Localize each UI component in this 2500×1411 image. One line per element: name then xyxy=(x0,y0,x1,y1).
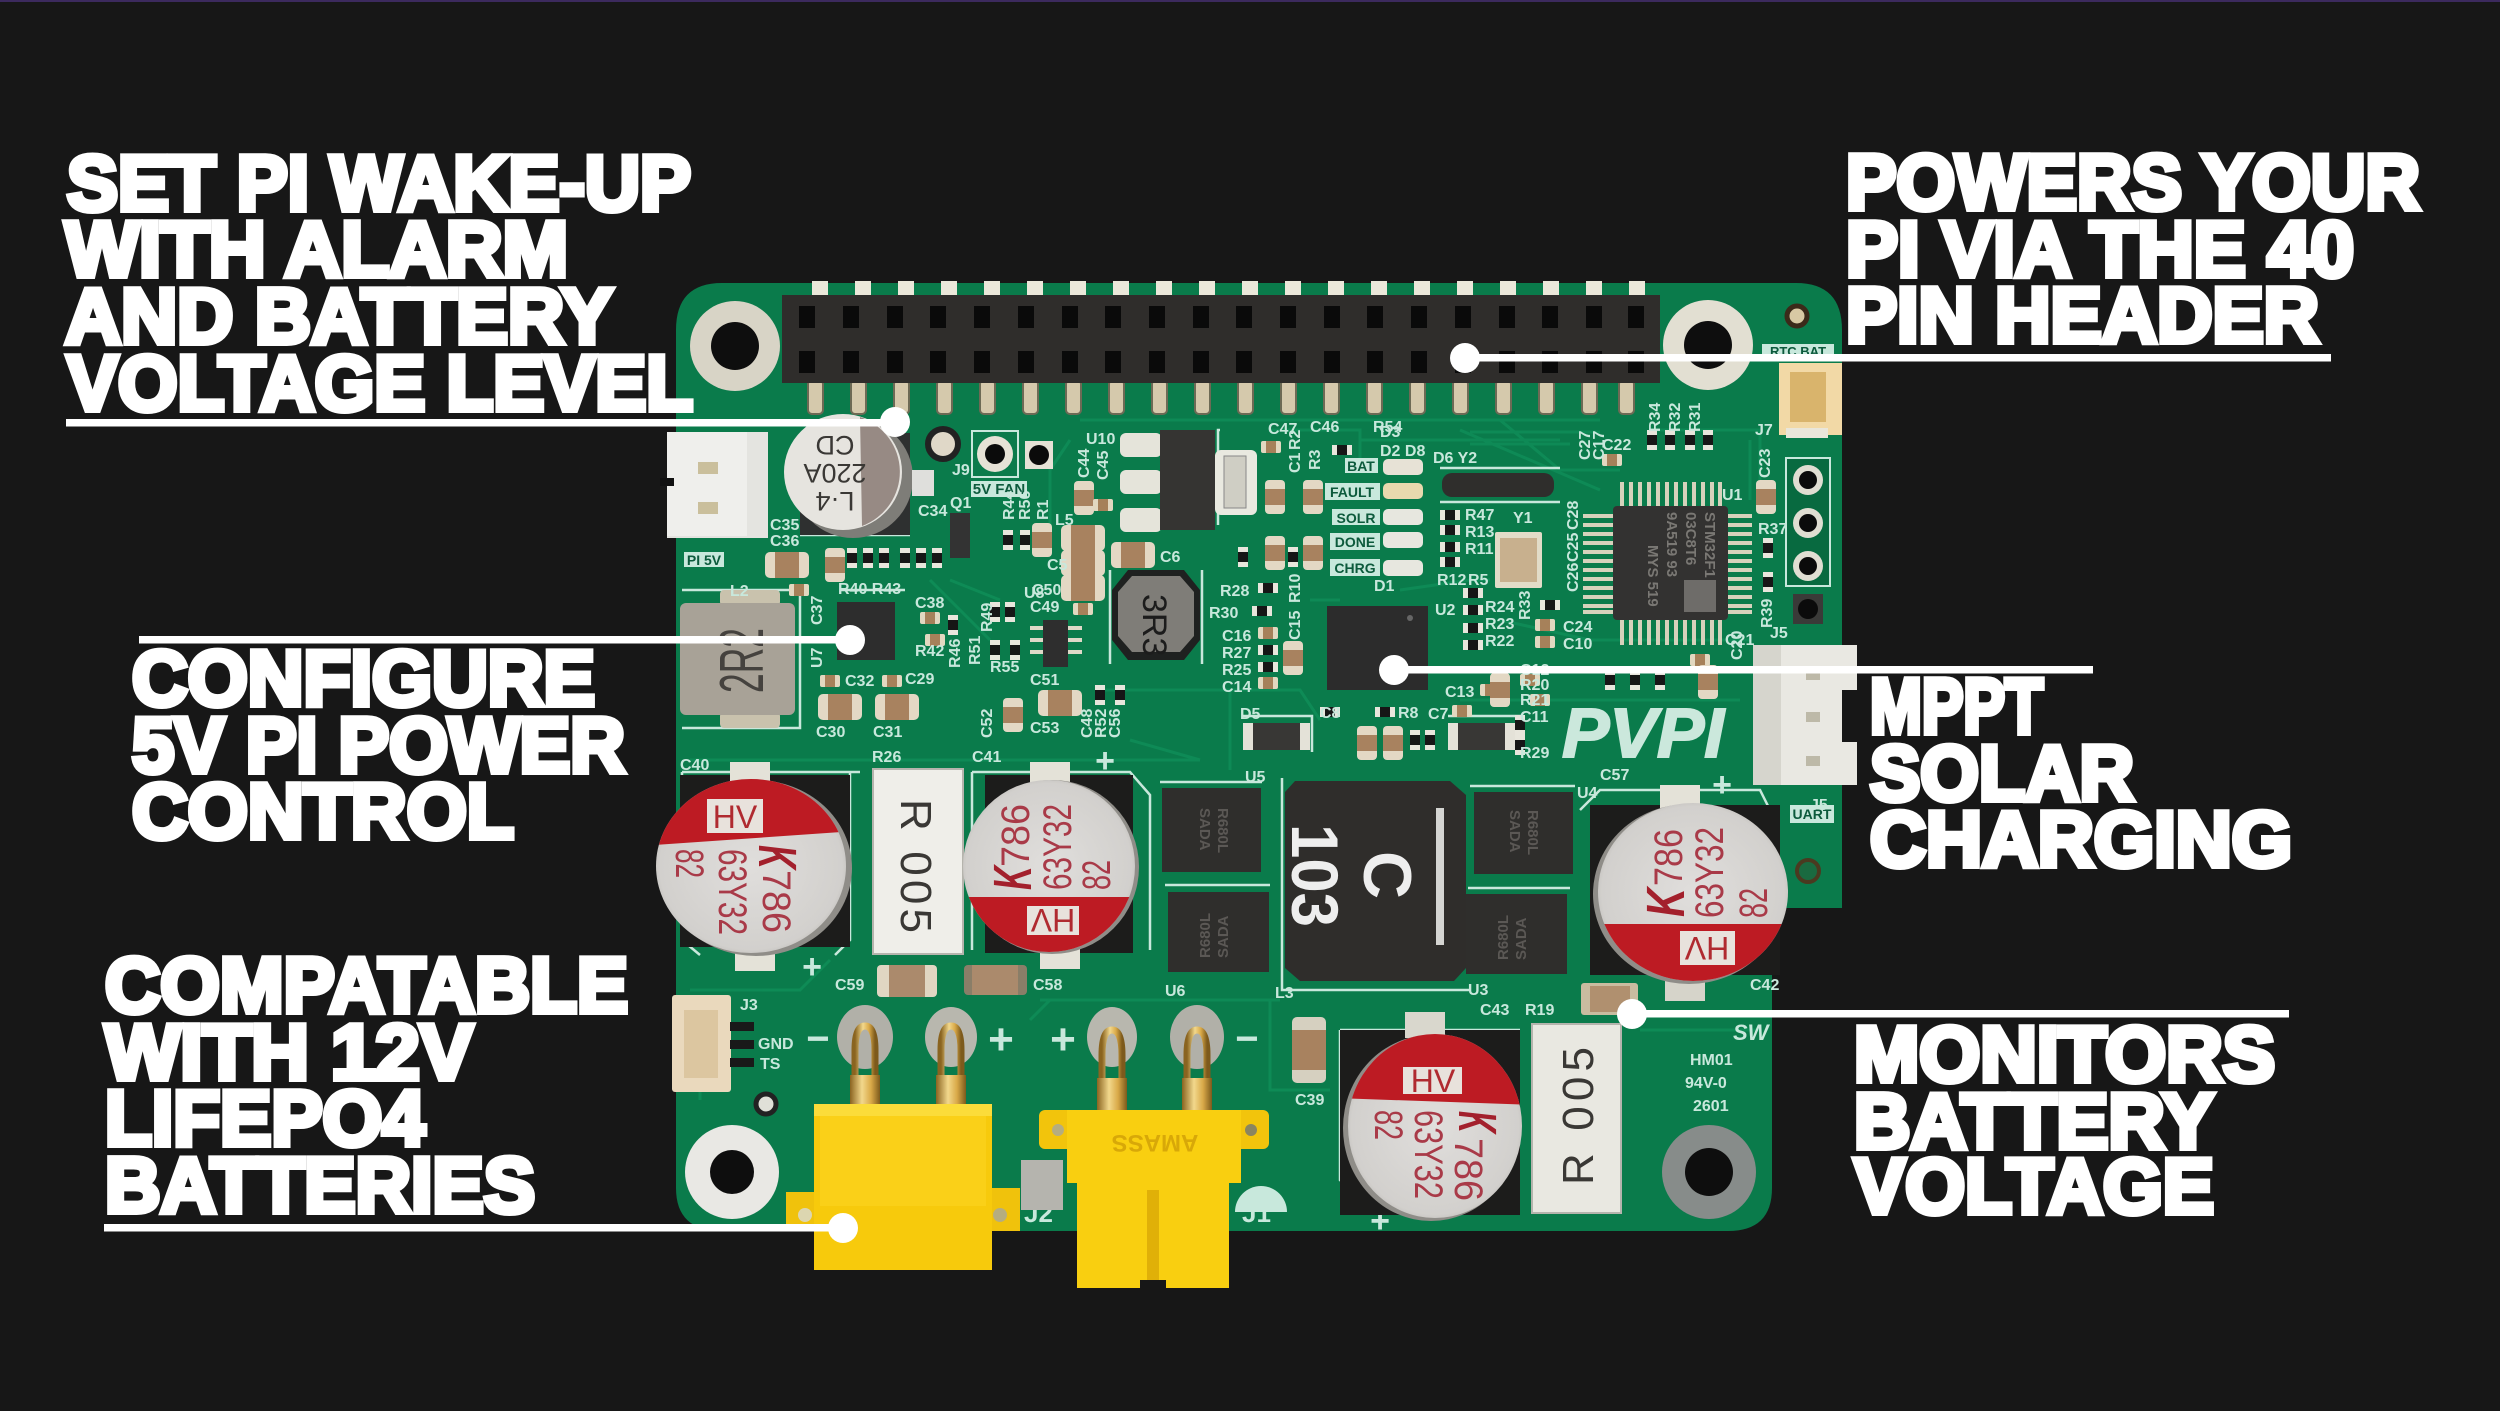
silkscreen labels: SW xyxy=(1733,1020,1771,1045)
silkscreen labels: C40 xyxy=(680,757,709,774)
silkscreen labels: C59 xyxy=(835,977,864,994)
inductor 3R3: 3R3 xyxy=(1135,594,1173,656)
electrolytic capacitor C43: 63Y32 xyxy=(1406,1110,1450,1199)
MOSFET U4 xyxy=(1474,792,1573,874)
silkscreen labels: U4 xyxy=(1577,785,1598,802)
silkscreen labels: C26 xyxy=(1565,563,1582,592)
silkscreen labels: R51 xyxy=(967,636,984,665)
heading: configure 5v pi power: CONTROL xyxy=(132,767,514,855)
heading: mppt solar charging: SOLAR xyxy=(1870,729,2134,817)
resistor R19: R 005 xyxy=(1554,1047,1603,1185)
silkscreen labels: + xyxy=(1712,766,1732,804)
resistor R26 xyxy=(873,769,963,954)
top solder pads xyxy=(812,281,1645,297)
silkscreen labels: R11 xyxy=(1465,541,1494,558)
RTC battery connector: RTC BAT xyxy=(1770,344,1826,359)
silkscreen labels: J7 xyxy=(1755,422,1773,439)
silkscreen labels: D6 Y2 xyxy=(1433,450,1477,467)
connector: Pi 5V: PI 5V xyxy=(687,552,722,568)
MOSFET U5 xyxy=(1162,788,1261,872)
silkscreen labels: R26 xyxy=(872,749,901,766)
copper traces xyxy=(690,420,1760,1100)
connector: Pi 5V xyxy=(660,432,768,568)
silkscreen labels: C45 xyxy=(1095,451,1112,480)
chip U7 xyxy=(837,602,895,660)
status LEDs and labels: SOLR xyxy=(1337,510,1375,526)
electrolytic capacitor C41: 63Y32 xyxy=(1036,804,1080,890)
silkscreen labels: C8 xyxy=(1320,705,1341,722)
silkscreen labels: + xyxy=(988,1015,1014,1064)
chip U2 xyxy=(1327,606,1428,690)
silkscreen labels: R3 xyxy=(1307,449,1324,470)
silkscreen labels: C1 xyxy=(1287,452,1304,473)
silkscreen labels: C56 xyxy=(1107,709,1124,738)
electrolytic capacitor C40: 786 xyxy=(754,870,798,933)
silkscreen labels: R32 xyxy=(1667,403,1684,432)
heading: configure 5v pi power xyxy=(132,634,625,855)
silkscreen labels: R1 xyxy=(1035,499,1052,520)
silkscreen labels: C28 xyxy=(1565,501,1582,530)
silkscreen labels: C22 xyxy=(1602,437,1631,454)
capacitor 220 xyxy=(784,414,934,538)
electrolytic capacitor C42: HV xyxy=(1684,930,1729,966)
status LEDs and labels xyxy=(1325,458,1423,576)
STM32 microcontroller xyxy=(1583,482,1752,645)
callout line: mppt xyxy=(1379,655,2093,685)
silkscreen labels: C41 xyxy=(972,749,1001,766)
silkscreen labels: C30 xyxy=(816,724,845,741)
heading: set pi wake-up: VOLTAGE LEVEL xyxy=(67,339,693,427)
heading: set pi wake-up: WITH ALARM xyxy=(65,205,568,293)
silkscreen labels: J5 xyxy=(1810,797,1828,814)
STM32 microcontroller: MYS 519 xyxy=(1644,545,1661,607)
silkscreen labels: U10 xyxy=(1086,431,1115,448)
polarity marks: − xyxy=(806,1017,830,1061)
silkscreen labels: C58 xyxy=(1033,977,1062,994)
heading: monitors battery voltage: MONITORS xyxy=(1854,1010,2275,1098)
silkscreen labels: C53 xyxy=(1030,720,1059,737)
STM32 microcontroller: 03C8T6 xyxy=(1682,512,1699,565)
silkscreen labels: 94V-0 xyxy=(1685,1075,1727,1092)
silkscreen labels: R33 xyxy=(1517,591,1534,620)
capacitor 220: CD xyxy=(816,430,854,460)
silkscreen labels: R19 xyxy=(1525,1002,1554,1019)
heading: powers your pi xyxy=(1846,138,2420,359)
heading: monitors battery voltage xyxy=(1854,1010,2275,1230)
silkscreen labels: C12 xyxy=(1520,662,1549,679)
MOSFET lower right: R680L xyxy=(1495,915,1512,960)
UART header J6 holes xyxy=(1786,458,1830,624)
electrolytic capacitor C40: 82 xyxy=(667,849,711,878)
silkscreen labels: R23 xyxy=(1485,616,1514,633)
silkscreen labels: R24 xyxy=(1485,599,1514,616)
MPPT connector xyxy=(1753,645,1857,823)
silkscreen labels: R5 xyxy=(1468,572,1489,589)
silkscreen labels: + xyxy=(1095,742,1115,780)
crystal Y1 xyxy=(1495,532,1542,588)
heading: set pi wake-up: AND BATTERY xyxy=(65,272,613,360)
crystal Y2 xyxy=(1442,473,1554,497)
MOSFET U6: SADA xyxy=(1215,915,1232,958)
inductor 2R2 xyxy=(680,590,795,728)
capacitor 220: L·4 xyxy=(815,486,855,516)
silkscreen labels: C50 xyxy=(1032,582,1061,599)
silkscreen labels: C47 xyxy=(1268,421,1297,438)
heading: mppt solar charging: MPPT xyxy=(1870,662,2043,750)
main inductor C103: 103 xyxy=(1278,824,1352,927)
resistor R19 xyxy=(1532,1024,1621,1213)
heading: mppt solar charging: CHARGING xyxy=(1870,795,2292,883)
MOSFET U4: SADA xyxy=(1506,810,1523,853)
callout line: 40 pin header xyxy=(1450,343,2331,373)
heading: set pi wake-up: SET PI WAKE-UP xyxy=(67,139,691,227)
heading: monitors battery voltage: VOLTAGE xyxy=(1854,1142,2214,1230)
silkscreen labels: HM01 xyxy=(1690,1052,1733,1069)
silkscreen labels: C6 xyxy=(1160,549,1181,566)
capacitor 220: 220A xyxy=(803,458,867,488)
silkscreen labels: L5 xyxy=(1055,512,1074,529)
connector J3 xyxy=(672,995,754,1092)
silkscreen labels: C37 xyxy=(809,596,826,625)
MOSFET U5: R680L xyxy=(1214,808,1231,853)
sun logo xyxy=(1235,1186,1287,1212)
XT30 connector J2 xyxy=(786,1005,1020,1270)
silkscreen labels: C35 xyxy=(770,517,799,534)
electrolytic capacitor C41 xyxy=(963,762,1139,969)
status LEDs and labels: FAULT xyxy=(1330,484,1374,500)
silkscreen labels: C17 xyxy=(1591,431,1608,460)
silkscreen labels: R29 xyxy=(1520,745,1549,762)
silkscreen labels: R47 xyxy=(1465,507,1494,524)
electrolytic capacitor C43: 786 xyxy=(1446,1138,1490,1201)
RTC battery connector xyxy=(1762,344,1842,438)
silkscreen labels: + xyxy=(1050,1015,1076,1064)
heading: compatible with lifepo4: WITH 12V xyxy=(105,1008,473,1096)
electrolytic capacitor C41: 786 xyxy=(994,804,1038,867)
inductor 2R2: 2R2 xyxy=(708,628,777,693)
main inductor C103: C xyxy=(1349,851,1425,899)
silkscreen labels: R2 xyxy=(1287,429,1304,450)
STM32 microcontroller: STM32F1 xyxy=(1701,512,1718,578)
silkscreen labels: R8 xyxy=(1398,705,1419,722)
status LEDs and labels: CHRG xyxy=(1334,560,1376,576)
heading: powers your pi: PIN HEADER xyxy=(1846,271,2319,359)
silkscreen labels: U6 xyxy=(1165,983,1186,1000)
silkscreen labels: L3 xyxy=(1275,985,1294,1002)
silkscreen labels: C49 xyxy=(1030,599,1059,616)
electrolytic capacitor C41: HV xyxy=(1030,902,1075,938)
electrolytic capacitor C42: 786 xyxy=(1647,829,1691,886)
silkscreen labels: R44 xyxy=(1001,491,1018,520)
silkscreen labels: U1 xyxy=(1722,487,1743,504)
silkscreen labels: C31 xyxy=(873,724,902,741)
silkscreen labels: R28 xyxy=(1220,583,1249,600)
silkscreen labels: J9 xyxy=(952,462,970,479)
silkscreen labels: R22 xyxy=(1485,633,1514,650)
silkscreen labels: J2 xyxy=(1024,1198,1053,1228)
large ceramic capacitors xyxy=(877,965,1638,1210)
silkscreen labels: U8 xyxy=(1024,585,1045,602)
silkscreen labels: R54 xyxy=(1373,419,1402,436)
circuit board xyxy=(656,281,1857,1288)
silkscreen labels: R40 R43 xyxy=(838,581,901,598)
status LEDs and labels: DONE xyxy=(1335,534,1375,550)
silkscreen labels: C24 xyxy=(1563,619,1592,636)
silkscreen labels: C32 xyxy=(845,673,874,690)
MOSFET U6: R680L xyxy=(1197,913,1214,958)
silkscreen labels: C52 xyxy=(979,709,996,738)
silkscreen labels: R34 xyxy=(1647,403,1664,432)
electrolytic capacitor C43: 82 xyxy=(1366,1110,1410,1140)
electrolytic capacitor C40: 63Y32 xyxy=(710,849,754,935)
40 pin header xyxy=(782,281,1660,414)
fan header J9 xyxy=(971,431,1053,498)
silkscreen labels: C25 xyxy=(1565,533,1582,562)
electrolytic capacitor C41: 82 xyxy=(1075,860,1119,890)
silkscreen labels: C10 xyxy=(1563,636,1592,653)
silkscreen labels: C43 xyxy=(1480,1002,1509,1019)
silkscreen labels: C5 xyxy=(1047,557,1068,574)
silkscreen labels xyxy=(680,403,1828,1240)
silkscreen labels: C7 xyxy=(1428,706,1449,723)
silkscreen labels: C29 xyxy=(905,671,934,688)
heading: configure 5v pi power: 5V PI POWER xyxy=(132,701,625,789)
XT30 connector J1 xyxy=(1039,1005,1269,1288)
electrolytic capacitor C42 xyxy=(1590,785,1788,1001)
diodes xyxy=(1243,723,1310,750)
heading: monitors battery voltage: BATTERY xyxy=(1854,1077,2214,1165)
silkscreen labels: TS xyxy=(760,1056,781,1073)
electrolytic capacitor C40: HV xyxy=(713,799,758,835)
silkscreen labels: Y1 xyxy=(1513,510,1533,527)
silkscreen labels: R21 xyxy=(1520,692,1549,709)
silkscreen labels: C14 xyxy=(1222,679,1251,696)
silkscreen labels: C39 xyxy=(1295,1092,1324,1109)
silkscreen component frames xyxy=(682,430,1770,1215)
PVPI logo: PVPI xyxy=(1562,694,1726,772)
callout line: battery voltage xyxy=(1617,999,2289,1029)
silkscreen labels: R31 xyxy=(1687,403,1704,432)
silkscreen labels: R13 xyxy=(1465,524,1494,541)
silkscreen labels: J3 xyxy=(740,997,758,1014)
header sockets xyxy=(799,306,1644,373)
MOSFET lower right: SADA xyxy=(1513,917,1530,960)
silkscreen labels: R10 xyxy=(1287,574,1304,603)
silkscreen labels: R20 xyxy=(1520,677,1549,694)
silkscreen labels: C36 xyxy=(770,533,799,550)
silkscreen labels: R30 xyxy=(1209,605,1238,622)
silkscreen labels: R56 xyxy=(1017,491,1034,520)
silkscreen labels: R46 xyxy=(947,639,964,668)
heading: set pi wake-up xyxy=(65,139,693,427)
silkscreen labels: D2 D8 xyxy=(1380,443,1425,460)
electrolytic capacitor C41: K xyxy=(983,864,1043,890)
silkscreen labels: R37 xyxy=(1758,521,1787,538)
heading: mppt solar charging xyxy=(1870,662,2292,883)
resistor R26: R 005 xyxy=(891,799,940,933)
silkscreen labels: U3 xyxy=(1468,982,1489,999)
fan header J9: 5V FAN xyxy=(973,481,1025,498)
silkscreen labels: + xyxy=(1370,1202,1390,1240)
heading: configure 5v pi power: CONFIGURE xyxy=(132,634,595,722)
electrolytic capacitor C40: K xyxy=(747,845,807,871)
MOSFET U4: R680L xyxy=(1524,810,1541,855)
silkscreen labels: C48 xyxy=(1079,709,1096,738)
callout line: wake-up xyxy=(66,407,910,437)
MOSFET U5: SADA xyxy=(1196,808,1213,851)
silkscreen labels: D3 xyxy=(1380,424,1401,441)
electrolytic capacitor C40 xyxy=(656,762,852,971)
silkscreen labels: U2 xyxy=(1435,602,1456,619)
callout line: 5v power xyxy=(139,625,865,655)
heading: compatible with lifepo4: BATTERIES xyxy=(105,1141,535,1229)
silkscreen labels: R52 xyxy=(1093,709,1110,738)
status LEDs and labels: BAT xyxy=(1347,458,1375,474)
silkscreen labels: + xyxy=(802,948,822,986)
MPPT connector: UART xyxy=(1793,806,1832,822)
MOSFET U6 xyxy=(1168,892,1269,972)
silkscreen labels: C20 xyxy=(1729,631,1746,660)
silkscreen labels: C44 xyxy=(1076,449,1093,478)
silkscreen labels: C46 xyxy=(1310,419,1339,436)
silkscreen labels: J1 xyxy=(1242,1198,1271,1228)
silkscreen labels: C57 xyxy=(1600,767,1629,784)
silkscreen labels: C15 xyxy=(1287,611,1304,640)
XT30 connector J1: AMASS xyxy=(1112,1129,1198,1156)
heading: compatible with lifepo4 xyxy=(105,941,628,1229)
heading: powers your pi: PI VIA THE 40 xyxy=(1846,205,2354,293)
silkscreen labels: − xyxy=(1235,1017,1259,1061)
silkscreen labels: C11 xyxy=(1520,709,1549,726)
regulator U10 xyxy=(1120,430,1257,532)
silkscreen labels: GND xyxy=(758,1036,794,1053)
silkscreen labels: C23 xyxy=(1757,449,1774,478)
electrolytic capacitor C42: K xyxy=(1636,885,1696,917)
silkscreen labels: C38 xyxy=(915,595,944,612)
STM32 microcontroller: 9A519 93 xyxy=(1663,512,1680,577)
silkscreen labels: Q1 xyxy=(950,495,971,512)
electrolytic capacitor C43 xyxy=(1340,1012,1522,1221)
silkscreen labels: L2 xyxy=(730,583,749,600)
header body xyxy=(782,295,1660,383)
electrolytic capacitor C42: 82 xyxy=(1732,888,1776,918)
silkscreen labels: R12 xyxy=(1437,572,1466,589)
heading: powers your pi: POWERS YOUR xyxy=(1846,138,2420,226)
mounting holes xyxy=(685,300,1819,1219)
silkscreen labels: C51 xyxy=(1030,672,1059,689)
small surface mount parts xyxy=(765,430,1776,760)
main inductor C103 xyxy=(1278,781,1466,981)
silkscreen labels: R55 xyxy=(990,659,1019,676)
heading: compatible with lifepo4: COMPATABLE xyxy=(105,941,628,1029)
silkscreen labels: R42 xyxy=(915,643,944,660)
silkscreen labels: C27 xyxy=(1577,431,1594,460)
silkscreen labels: C16 xyxy=(1222,628,1251,645)
silkscreen labels: C13 xyxy=(1445,684,1474,701)
silkscreen labels: R49 xyxy=(979,603,996,632)
MOSFET lower right xyxy=(1466,894,1567,974)
inductor 3R3 xyxy=(1112,570,1200,660)
silkscreen labels: U5 xyxy=(1245,769,1266,786)
bottom pins xyxy=(808,380,1634,414)
silkscreen labels: R27 xyxy=(1222,645,1251,662)
silkscreen labels: U7 xyxy=(809,647,826,668)
silkscreen labels: C21 xyxy=(1725,632,1754,649)
silkscreen labels: 2601 xyxy=(1693,1098,1729,1115)
silkscreen labels: D1 xyxy=(1374,578,1395,595)
board outline xyxy=(676,283,1842,1231)
callout line: batteries xyxy=(104,1213,858,1243)
silkscreen labels: D5 xyxy=(1240,706,1261,723)
silkscreen labels: C34 xyxy=(918,503,947,520)
electrolytic capacitor C42: 63Y32 xyxy=(1688,827,1732,918)
silkscreen labels: J5 xyxy=(1770,625,1788,642)
silkscreen labels: C42 xyxy=(1750,977,1779,994)
silkscreen labels: R25 xyxy=(1222,662,1251,679)
electrolytic capacitor C43: K xyxy=(1447,1111,1507,1135)
top accent line xyxy=(0,0,2500,2)
heading: compatible with lifepo4: LIFEPO4 xyxy=(105,1074,425,1162)
silkscreen labels: R39 xyxy=(1759,599,1776,628)
electrolytic capacitor C43: HV xyxy=(1411,1063,1456,1099)
